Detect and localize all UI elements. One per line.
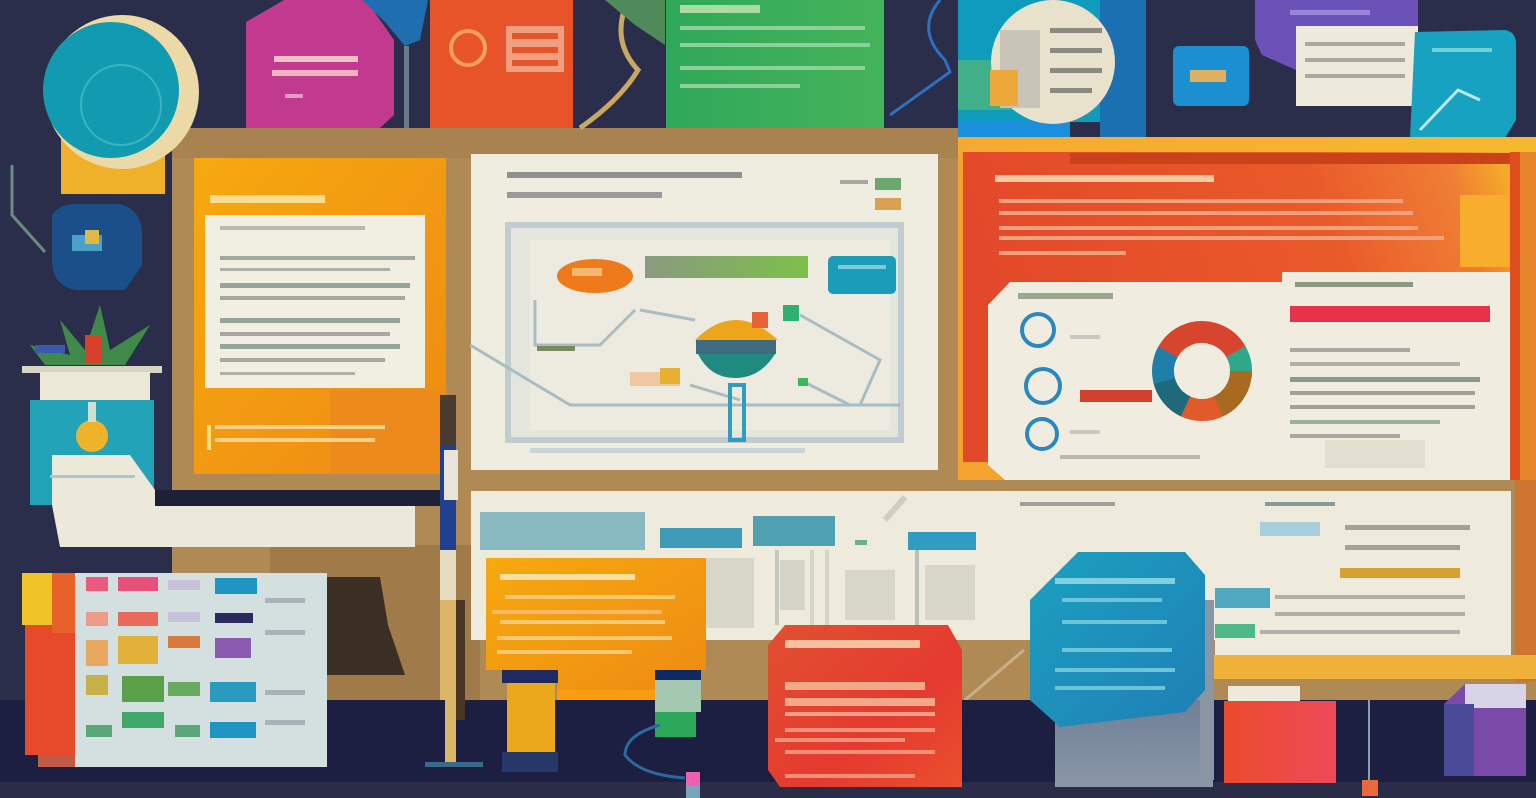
top row of cards (43, 0, 1516, 194)
orange cloud (557, 259, 633, 293)
card: colour table (22, 573, 327, 767)
text block: white sheet (205, 215, 425, 388)
connector: blue wire (890, 0, 950, 115)
card: orange notes tail (557, 690, 655, 700)
connector: cable (625, 725, 685, 778)
card: teal chart (1410, 30, 1516, 138)
card: teal block with yellow dot (30, 400, 154, 505)
bottom strip (0, 700, 1536, 782)
card: orange notes lower (486, 558, 706, 700)
connector lines (470, 300, 900, 405)
teal label (828, 256, 896, 294)
icon: blue circles (1022, 314, 1060, 449)
card: teal speech bubble (1030, 552, 1214, 787)
left side (12, 165, 440, 547)
card: purple note (1255, 0, 1418, 106)
card: orange card (430, 0, 573, 128)
icon: blue rounded tile (52, 204, 142, 290)
panel: orange notes (194, 158, 446, 474)
card: red note (768, 625, 962, 787)
card: red-pink block (1224, 686, 1336, 783)
panel: central flow diagram (470, 154, 938, 470)
white donut card (988, 272, 1510, 480)
panel: brown board (172, 128, 1536, 700)
icon: plant (30, 305, 150, 365)
dark notch beside table (327, 577, 405, 675)
icon: white pot (22, 366, 162, 402)
icon: blue pin (362, 0, 428, 128)
donut chart (1149, 318, 1255, 424)
text column (1290, 282, 1490, 468)
connector: winding path (580, 0, 638, 128)
green bar (645, 256, 808, 278)
icon: green leaf shape (605, 0, 665, 45)
panel: red-orange report (958, 137, 1536, 480)
pencil (425, 395, 483, 767)
card: teal document (958, 0, 1146, 138)
panel: lower flow chart (471, 491, 1536, 679)
card: magenta tag (246, 0, 394, 128)
icon: pink plug (686, 772, 700, 798)
connector: left wire (12, 165, 45, 252)
icon: teal circle badge on yellow tab (43, 15, 199, 194)
diagram frame (508, 225, 901, 440)
funnel (695, 305, 799, 440)
icon: purple box (1444, 684, 1526, 776)
shelf (50, 455, 440, 547)
icon: green cup (655, 670, 701, 737)
icon: blue tile (1173, 46, 1249, 106)
icon: pin marker (1362, 700, 1378, 796)
diagonal cream line (965, 650, 1024, 700)
card: green note (666, 0, 884, 128)
icon: orange jar (502, 670, 558, 772)
